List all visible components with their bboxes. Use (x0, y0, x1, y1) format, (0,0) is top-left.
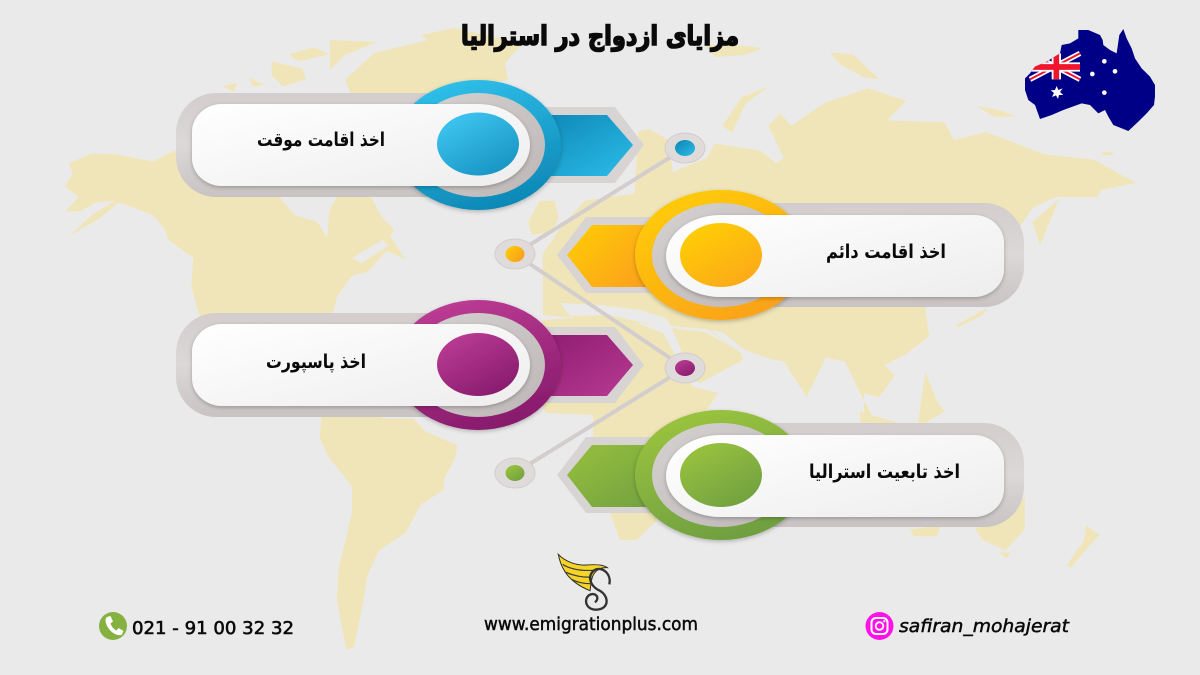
contact: phone (99, 612, 294, 640)
arrow: blue (530, 107, 644, 183)
arrow: orange (557, 217, 670, 293)
node: green (495, 458, 535, 488)
arrow: magenta (530, 327, 644, 403)
connector lines between nodes (515, 148, 685, 473)
node: blue (665, 133, 705, 163)
instagram handle: safiran_mohajerat (899, 616, 1070, 637)
label: passport: اخذ پاسپورت (266, 351, 366, 373)
icon: phone (99, 612, 127, 640)
logo: winged S (558, 554, 610, 610)
icon disc: orange (680, 223, 762, 287)
node: orange (495, 239, 535, 269)
phone number: 021 - 91 00 32 32 (132, 618, 294, 639)
label: temporary residence: اخذ اقامت موقت (257, 129, 385, 151)
panel: permanent residence (orange) (557, 190, 1024, 320)
contact: instagram (866, 612, 1070, 640)
icon disc: blue (437, 112, 519, 176)
label: Australian citizenship: اخذ تابعیت استرالیا (809, 461, 960, 483)
icon: Australia map with flag (1025, 29, 1155, 131)
icon: instagram (866, 612, 894, 640)
node: magenta (665, 353, 705, 383)
icon disc: magenta (437, 333, 519, 396)
label: permanent residence: اخذ اقامت دائم (826, 241, 946, 263)
panel: Australian citizenship (green) (557, 410, 1024, 540)
website address: www.emigrationplus.com (484, 614, 698, 635)
arrow: green (557, 437, 670, 513)
panel: temporary residence (blue) (176, 80, 644, 210)
panel: passport (magenta) (176, 300, 644, 430)
title: مزایای ازدواج در استرالیا (461, 21, 739, 52)
icon disc: green (680, 443, 762, 507)
